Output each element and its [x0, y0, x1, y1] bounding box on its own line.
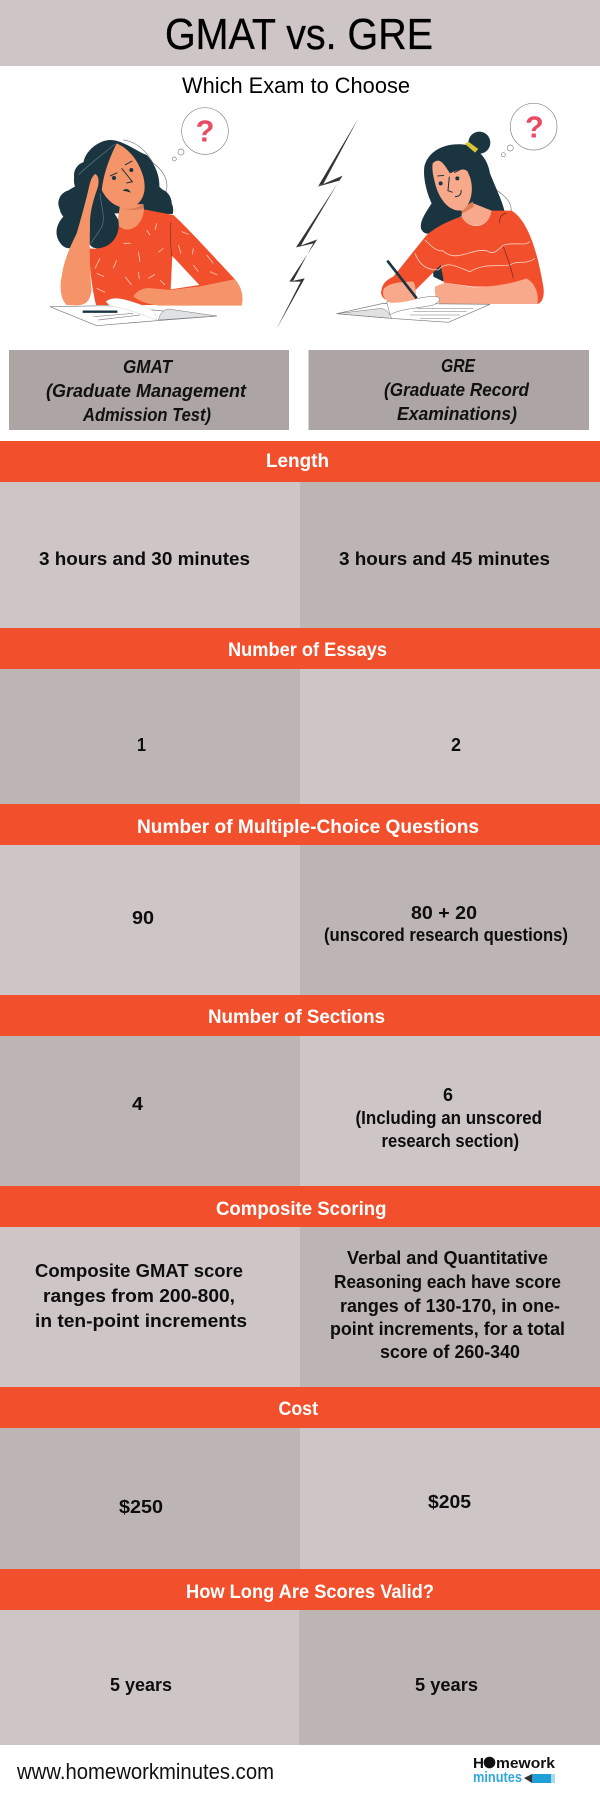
GRE name box	[308, 350, 589, 430]
panel: number of multiple-choice questions: 80 + 20	[411, 902, 477, 923]
panel: score validity	[0, 1569, 600, 1745]
icon: lightning bolt	[276, 118, 358, 330]
panel: number of sections: 6	[443, 1084, 453, 1105]
logo: homework minutes	[473, 1755, 556, 1786]
panel: number of sections	[0, 995, 600, 1186]
GMAT name box	[9, 350, 289, 430]
panel: number of sections: research section)	[382, 1130, 519, 1151]
panel: score validity: 5 years	[110, 1674, 172, 1695]
illustration: woman writing with thought bubble	[337, 103, 557, 322]
panel: composite scoring: point increments, for a total	[330, 1318, 565, 1339]
panel: composite scoring: score of 260-340	[380, 1341, 520, 1362]
panel: number of multiple-choice questions	[0, 804, 600, 995]
panel: number of essays: Number of Essays	[228, 640, 387, 661]
panel: number of multiple-choice questions: Number of Multiple-Choice Questions	[137, 817, 479, 838]
panel: number of sections: (Including an unscored	[356, 1107, 542, 1128]
logo: homework minutes: minutes	[473, 1769, 522, 1786]
panel: number of sections: 4	[132, 1093, 144, 1114]
GMAT name box: (Graduate Management	[46, 380, 247, 401]
panel: composite scoring: in ten-point increments	[35, 1310, 247, 1331]
footer website: www.homeworkminutes.com	[16, 1759, 274, 1784]
title banner	[0, 0, 600, 66]
panel: composite scoring	[0, 1186, 600, 1387]
panel: cost	[0, 1387, 600, 1569]
panel: number of multiple-choice questions: 90	[132, 907, 154, 928]
panel: composite scoring: Reasoning each have score	[334, 1271, 561, 1292]
GRE name box: GRE	[441, 355, 476, 376]
GRE name box: Examinations)	[397, 403, 517, 424]
GMAT name box: GMAT	[123, 356, 174, 377]
illustration: woman writing with thought bubble: ?	[525, 111, 544, 145]
panel: length: Length	[266, 451, 329, 472]
panel: composite scoring: Composite Scoring	[216, 1199, 386, 1220]
panel: score validity: 5 years	[415, 1674, 478, 1695]
panel: number of sections: Number of Sections	[208, 1007, 385, 1028]
panel: number of essays: 2	[451, 734, 461, 755]
panel: composite scoring: ranges of 130-170, in one-	[340, 1295, 560, 1316]
logo: homework minutes: mework	[496, 1755, 556, 1772]
panel: cost: $250	[119, 1496, 163, 1517]
subtitle: Which Exam to Choose	[182, 73, 410, 98]
panel: number of essays: 1	[137, 734, 146, 755]
illustration: confused woman with thought bubble	[50, 108, 243, 326]
panel: score validity: How Long Are Scores Valid?	[186, 1582, 434, 1603]
logo: homework minutes: H	[473, 1755, 484, 1772]
panel: length: 3 hours and 30 minutes	[39, 548, 250, 569]
panel: cost: Cost	[278, 1399, 319, 1420]
panel: length	[0, 441, 600, 628]
panel: composite scoring: Composite GMAT score	[35, 1260, 243, 1281]
panel: composite scoring: Verbal and Quantitative	[347, 1247, 548, 1268]
title banner: GMAT vs. GRE	[165, 10, 433, 59]
panel: cost: $205	[428, 1491, 471, 1512]
panel: number of essays	[0, 628, 600, 804]
GRE name box: (Graduate Record	[384, 379, 530, 400]
illustration: confused woman with thought bubble: ?	[196, 115, 214, 149]
panel: length: 3 hours and 45 minutes	[339, 548, 550, 569]
panel: composite scoring: ranges from 200-800,	[43, 1285, 235, 1306]
GMAT name box: Admission Test)	[82, 404, 211, 425]
panel: number of multiple-choice questions: (unscored research questions)	[324, 924, 568, 945]
